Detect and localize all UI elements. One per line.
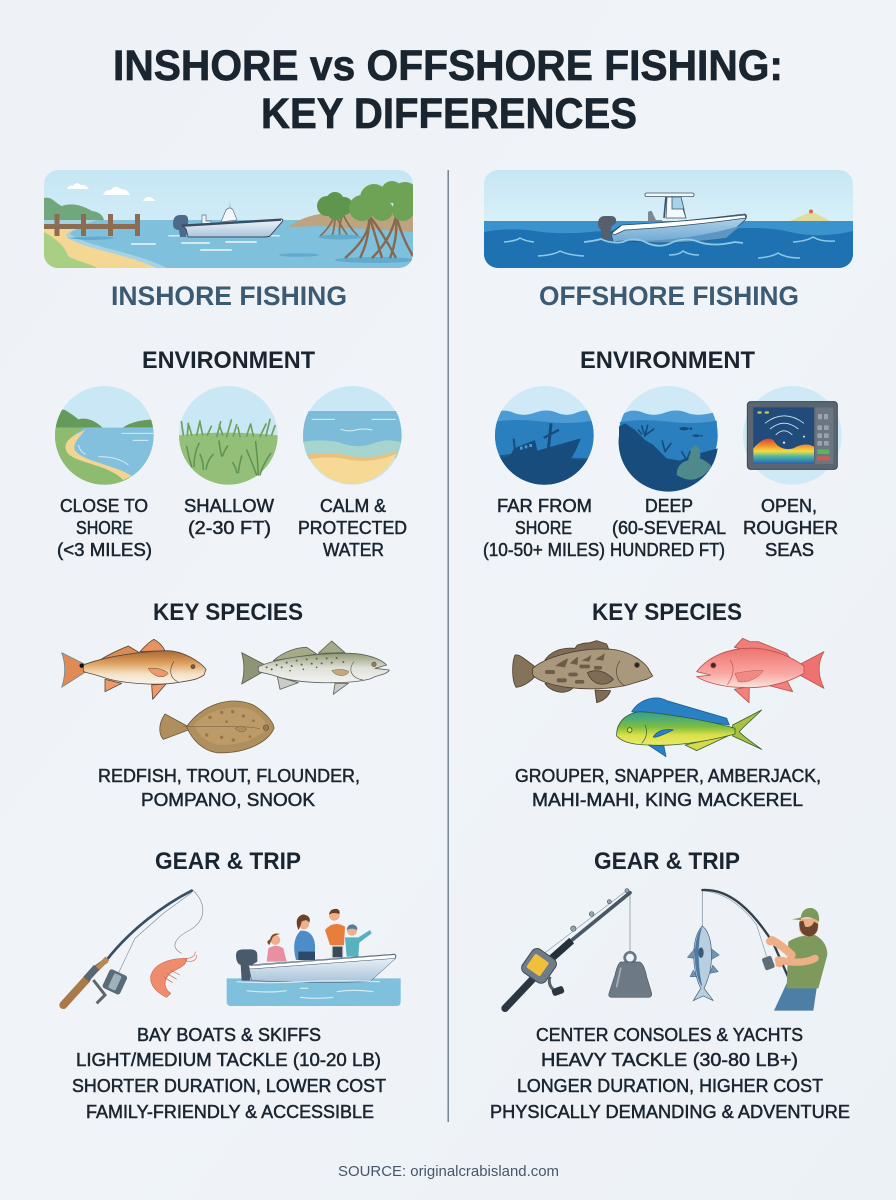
labels: inshore species: REDFISH, TROUT, FLOUNDER, [98, 766, 360, 786]
labels: offshore gear: LONGER DURATION, HIGHER COST [517, 1076, 823, 1096]
boy [345, 924, 372, 957]
icon: mahi-mahi [617, 698, 762, 757]
heading: offshore key species: KEY SPECIES [592, 599, 742, 626]
girl [267, 933, 287, 962]
dock [44, 214, 140, 236]
labels: offshore environment: FAR FROM [497, 496, 592, 516]
labels: offshore environment: OPEN, [761, 496, 817, 516]
labels: offshore environment: (60-SEVERAL [612, 518, 726, 538]
heading: inshore environment: ENVIRONMENT [142, 347, 315, 374]
labels: offshore species: GROUPER, SNAPPER, AMBERJACK, [515, 766, 821, 786]
father [325, 909, 345, 958]
icon: deep water reef [619, 386, 718, 492]
heading: inshore fishing: INSHORE FISHING [111, 281, 347, 311]
icon: sonar fish finder [743, 386, 842, 485]
labels: offshore environment: SEAS [765, 540, 814, 560]
icon: conventional rod and weight [505, 889, 652, 1008]
labels: inshore gear: FAMILY-FRIENDLY & ACCESSIBLE [86, 1102, 374, 1122]
banner: inshore scene [44, 170, 419, 268]
labels: offshore gear: CENTER CONSOLES & YACHTS [536, 1025, 803, 1045]
labels: offshore gear [490, 1025, 850, 1122]
labels: inshore gear: SHORTER DURATION, LOWER COST [72, 1076, 386, 1096]
labels: inshore environment: SHALLOW [184, 496, 274, 516]
labels: inshore environment: (<3 MILES) [57, 540, 152, 560]
labels: offshore environment: SHORE [515, 518, 572, 538]
labels: inshore gear [72, 1025, 386, 1122]
shrimp [151, 958, 187, 997]
labels: offshore environment: DEEP [645, 496, 693, 516]
icon: trout [242, 641, 389, 694]
heading: offshore environment: ENVIRONMENT [580, 347, 755, 374]
icon: calm water [303, 386, 402, 485]
boat [173, 201, 283, 237]
labels: offshore environment: (10-50+ MILES) [483, 540, 605, 560]
labels: offshore environment: HUNDRED FT) [610, 540, 725, 560]
icon: far from shore wreck [493, 385, 597, 487]
icon: redfish [62, 639, 206, 699]
labels: offshore environment [483, 496, 838, 560]
labels: inshore environment: WATER [323, 540, 384, 560]
icon: grouper [513, 641, 653, 703]
title: INSHORE vs OFFSHORE FISHING: [113, 42, 783, 90]
labels: inshore gear: BAY BOATS & SKIFFS [137, 1025, 321, 1045]
labels: inshore environment: CALM & [320, 496, 386, 516]
boat [584, 193, 746, 246]
heading: offshore gear and trip: GEAR & TRIP [594, 848, 740, 875]
banner: offshore scene [484, 170, 853, 268]
icon: shallow water grass [179, 386, 278, 485]
icon: flounder [160, 701, 274, 753]
labels: inshore gear: LIGHT/MEDIUM TACKLE (10-20 LB) [76, 1050, 381, 1070]
mother [294, 914, 315, 960]
labels: offshore environment: ROUGHER [743, 518, 838, 538]
icon: close to shore [53, 385, 157, 487]
labels: inshore species [98, 766, 360, 810]
labels: inshore species: POMPANO, SNOOK [141, 790, 315, 810]
labels: offshore species: MAHI-MAHI, KING MACKEREL [532, 790, 803, 810]
labels: offshore species [515, 766, 821, 810]
icon: snapper [697, 638, 824, 703]
heading: inshore gear and trip: GEAR & TRIP [155, 848, 301, 875]
labels: offshore gear: HEAVY TACKLE (30-80 LB+) [541, 1050, 798, 1070]
labels: inshore environment: SHORE [76, 518, 133, 538]
icon: angler with tuna [687, 890, 827, 1011]
labels: inshore environment: (2-30 FT) [188, 518, 271, 538]
icon: spinning rod and shrimp [63, 890, 203, 1005]
title [113, 42, 783, 138]
labels: inshore environment: CLOSE TO [60, 496, 148, 516]
labels: offshore gear: PHYSICALLY DEMANDING & ADVENTURE [490, 1102, 850, 1122]
heading: inshore key species: KEY SPECIES [153, 599, 303, 626]
icon: family on bay boat [227, 909, 401, 1006]
angler [761, 908, 827, 1011]
tuna [687, 926, 719, 1001]
title: KEY DIFFERENCES [261, 90, 637, 138]
heading: offshore fishing: OFFSHORE FISHING [539, 281, 799, 311]
labels: inshore environment [57, 496, 407, 560]
source credit: SOURCE: originalcrabisland.com [338, 1164, 559, 1180]
labels: inshore environment: PROTECTED [298, 518, 407, 538]
